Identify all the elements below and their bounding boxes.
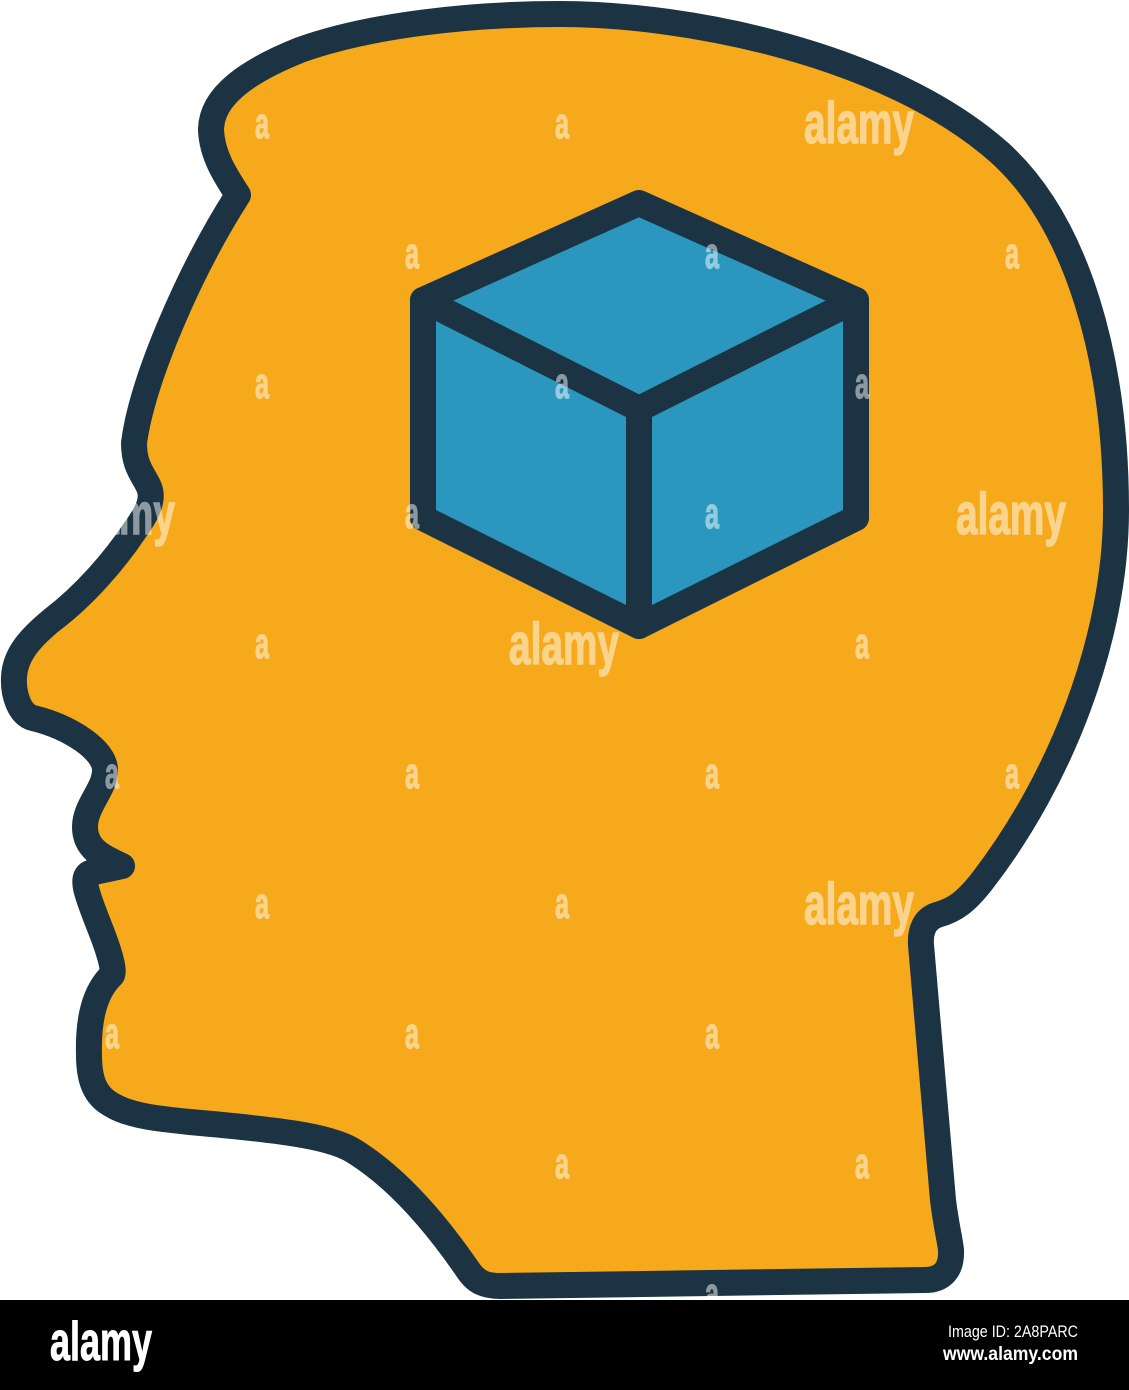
watermarks: alamy <box>65 482 175 547</box>
watermarks: a <box>405 489 419 538</box>
cube right face <box>639 300 856 626</box>
watermarks: a <box>105 749 119 798</box>
watermarks: a <box>855 1139 869 1188</box>
watermarks: a <box>255 879 269 928</box>
watermarks: a <box>705 1009 719 1058</box>
watermarks: a <box>105 1009 119 1058</box>
watermarks: alamy <box>804 872 914 937</box>
watermarks: a <box>705 489 719 538</box>
watermarks: a <box>855 359 869 408</box>
watermarks: alamy <box>956 482 1066 547</box>
watermarks: a <box>705 229 719 278</box>
watermarks <box>65 91 1066 1318</box>
image id: Image ID: 2A8PARC <box>948 1322 1078 1341</box>
watermarks: a <box>855 619 869 668</box>
watermarks: alamy <box>804 91 914 156</box>
site url: www.alamy.com <box>942 1344 1078 1365</box>
watermarks: a <box>555 359 569 408</box>
watermarks: a <box>255 619 269 668</box>
watermarks: a <box>1005 749 1019 798</box>
watermarks: a <box>405 1009 419 1058</box>
watermarks: a <box>1005 229 1019 278</box>
watermarks: alamy <box>509 612 619 677</box>
watermarks: a <box>405 229 419 278</box>
watermarks: a <box>405 749 419 798</box>
watermarks: a <box>555 879 569 928</box>
watermarks: a <box>255 359 269 408</box>
footer bar <box>0 1300 1129 1390</box>
footer logo: alamy <box>50 1310 152 1372</box>
watermarks: a <box>555 99 569 148</box>
watermarks: a <box>705 749 719 798</box>
watermarks: a <box>255 99 269 148</box>
cube left face <box>423 300 639 626</box>
cube top face <box>423 203 856 409</box>
icon: cube <box>423 203 856 626</box>
watermarks: a <box>555 1139 569 1188</box>
watermarks: a <box>705 1269 719 1318</box>
